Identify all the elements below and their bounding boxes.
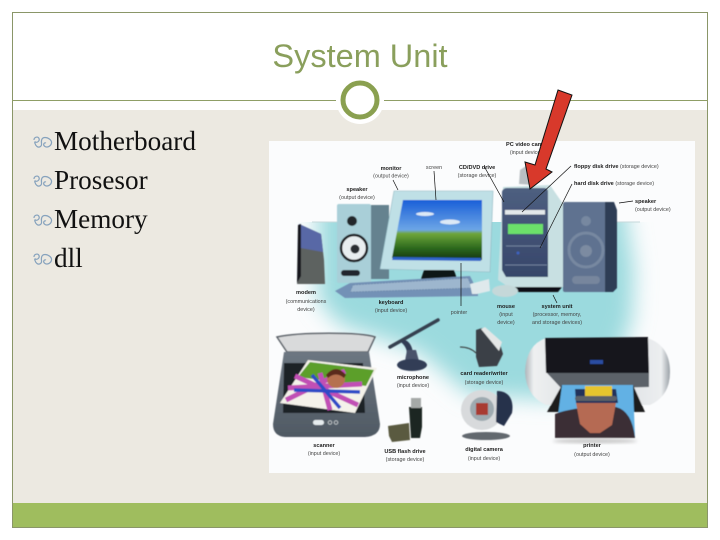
bullet list	[34, 126, 196, 273]
bullet: Motherboard: Motherboard	[54, 126, 196, 156]
label: system unit: system unit	[541, 304, 573, 310]
content panel	[12, 110, 708, 503]
label: modem: modem	[296, 290, 316, 296]
label: keyboard: (input device)	[375, 308, 407, 314]
label: USB flash drive: USB flash drive	[384, 449, 426, 455]
label: USB flash drive	[384, 449, 426, 463]
label: modem: (communications	[286, 299, 327, 305]
computer system picture	[269, 141, 695, 473]
label: microphone	[397, 375, 429, 389]
teal backdrop	[318, 190, 634, 400]
title: System Unit	[272, 38, 448, 74]
label: CD/DVD drive	[458, 165, 497, 179]
label: PC video camera	[506, 142, 552, 156]
horizon line	[312, 221, 640, 223]
monitor	[380, 191, 493, 279]
label: card reader/writer	[460, 371, 508, 386]
label: scanner: scanner	[313, 443, 336, 449]
right speaker	[563, 202, 617, 292]
label: left speaker: (output device)	[339, 195, 375, 201]
label: right speaker: (output device)	[635, 207, 671, 213]
label: monitor: (output device)	[373, 174, 409, 180]
label: card reader/writer: (storage device)	[465, 380, 504, 386]
bullet: Memory: Memory	[54, 204, 148, 234]
label: mouse: (input	[499, 312, 513, 318]
card reader	[460, 327, 503, 367]
printer	[525, 337, 670, 438]
printer shadow	[553, 438, 637, 444]
label: scanner	[308, 443, 340, 457]
label: monitor	[373, 166, 409, 180]
label: system unit: (processor, memory,	[533, 312, 582, 318]
label: modem	[286, 290, 327, 313]
microphone	[390, 320, 438, 371]
label: digital camera: digital camera	[465, 447, 504, 453]
label: PC video camera: PC video camera	[506, 142, 552, 148]
label: CD/DVD drive: CD/DVD drive	[459, 165, 495, 171]
label: mouse: mouse	[497, 304, 515, 310]
footer bar	[12, 503, 708, 527]
bullet: dll: dll	[54, 243, 83, 273]
label: floppy disk drive: floppy disk drive (storage device)	[574, 164, 659, 170]
label: CD/DVD drive: (storage device)	[458, 173, 497, 179]
digital camera	[461, 390, 512, 440]
label: printer: printer	[583, 443, 602, 449]
PC video camera	[519, 166, 533, 185]
label: printer: (output device)	[574, 452, 610, 458]
label: left speaker	[339, 187, 375, 201]
label: mouse	[497, 304, 515, 326]
label: card reader/writer: card reader/writer	[460, 371, 508, 377]
label: USB flash drive: (storage device)	[386, 457, 425, 463]
header rule	[12, 100, 708, 102]
pointer lines	[393, 166, 633, 306]
header ring	[336, 76, 384, 124]
label: keyboard: keyboard	[379, 300, 404, 306]
bullet: dll	[34, 243, 83, 273]
label: right speaker	[635, 199, 671, 213]
mouse	[492, 285, 518, 297]
label: microphone: microphone	[397, 375, 429, 381]
label: modem: device)	[297, 307, 315, 313]
label: microphone: (input device)	[397, 383, 429, 389]
scanner	[273, 333, 380, 437]
label: PC video camera: (input device)	[510, 150, 542, 156]
system unit tower	[498, 185, 563, 292]
label: right speaker: speaker	[635, 199, 657, 205]
label: system unit: and storage devices)	[532, 320, 582, 326]
keyboard	[335, 276, 490, 298]
label: screen: screen	[426, 165, 442, 171]
device labels	[286, 142, 671, 463]
modem	[297, 224, 325, 284]
label: keyboard	[375, 300, 407, 314]
label: system unit	[532, 304, 582, 326]
red arrow	[525, 90, 572, 189]
label: printer	[574, 443, 610, 458]
label: digital camera	[465, 447, 504, 462]
label: pointer: pointer	[451, 310, 467, 316]
label: mouse: device)	[497, 320, 515, 326]
label: digital camera: (input device)	[468, 456, 500, 462]
label: monitor: monitor	[381, 166, 402, 172]
left speaker	[337, 204, 389, 283]
USB flash drive	[388, 398, 422, 442]
bullet: Prosesor: Prosesor	[54, 165, 148, 195]
label: scanner: (input device)	[308, 451, 340, 457]
label: left speaker: speaker	[346, 187, 368, 193]
label: hard disk drive: hard disk drive (storage device)	[574, 181, 654, 187]
picture background	[269, 141, 695, 473]
